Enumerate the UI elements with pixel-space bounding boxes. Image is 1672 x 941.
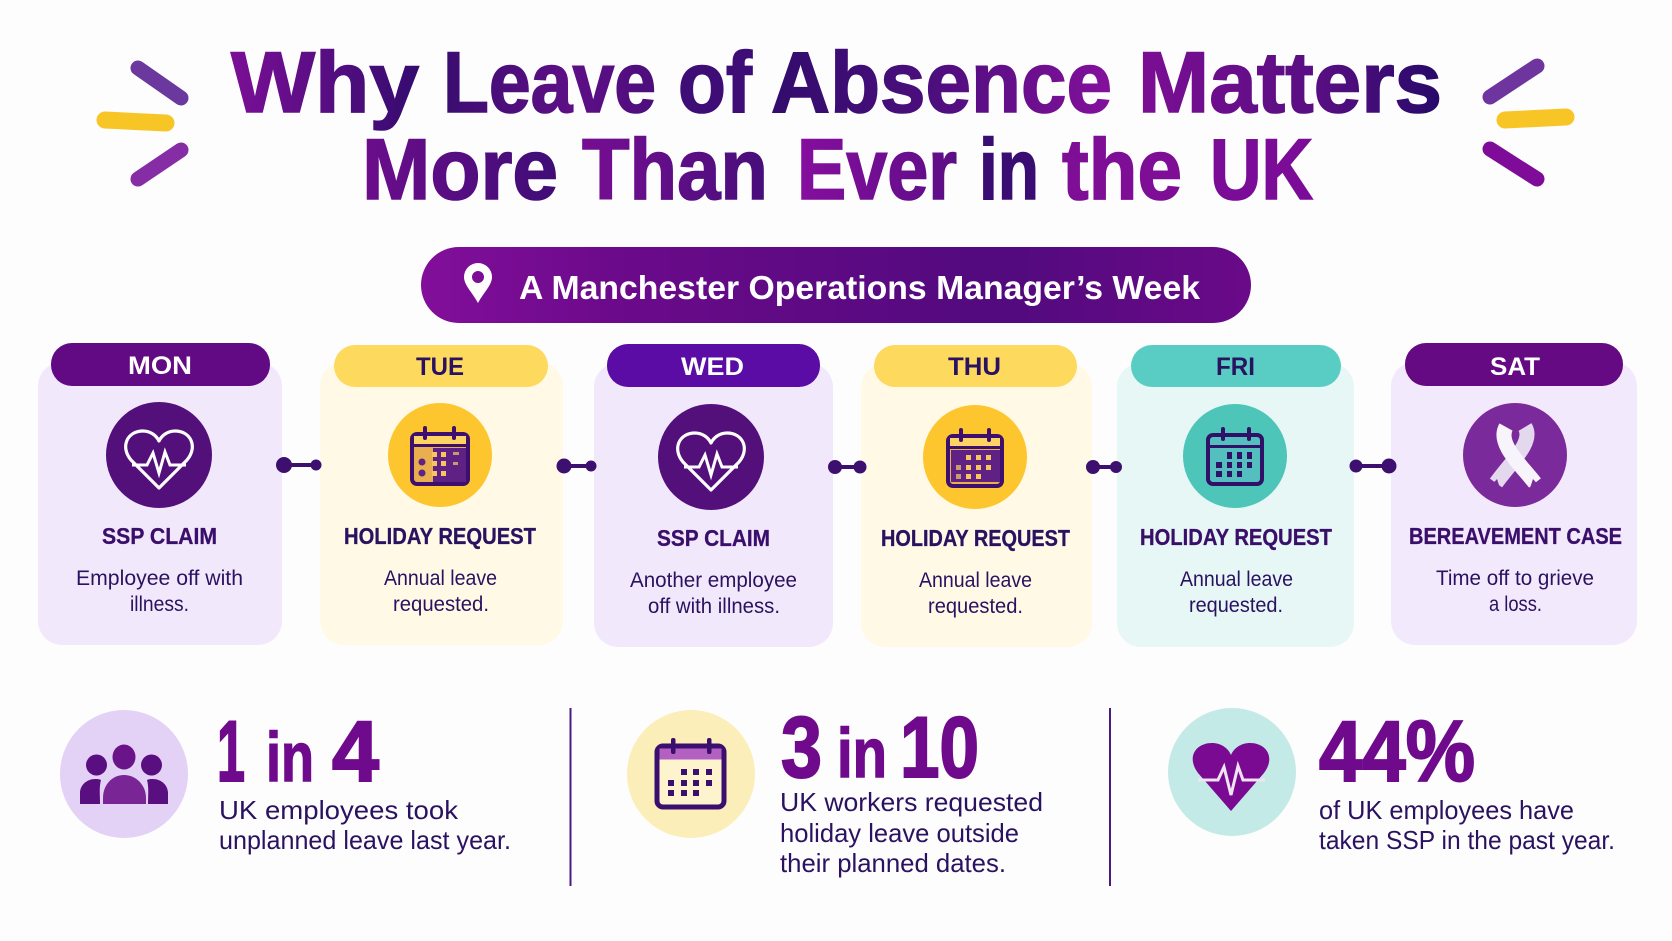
stat: 1 in 4: 1 [217,704,245,800]
icon: people [80,744,168,804]
panel: Saturday: Time off to grieve [1436,567,1594,590]
title: UK [1210,122,1313,218]
title [231,35,1442,218]
stat: 1 in 4: 4 [332,704,379,800]
stat: 1 in 4: unplanned leave last year. [219,825,511,855]
panel: Thursday [861,345,1092,647]
stat: 3 in 10: 3 [781,700,822,796]
panel: Monday: illness. [130,593,189,616]
panel: Wednesday: SSP CLAIM [657,525,770,551]
stat: 3 in 10 [627,700,1043,878]
title: the [1062,122,1182,218]
title: More [362,122,558,218]
panel: Tuesday [320,345,563,645]
stat: 44% [1168,704,1615,855]
stat: 1 in 4: in [266,718,314,796]
stat: 1 in 4: UK employees took [219,795,459,825]
connector Wed-Thu [828,460,866,474]
title: Matters [1138,35,1442,131]
panel: Friday: FRI [1216,353,1255,381]
panel: Saturday: a loss. [1489,593,1542,616]
panel: Friday [1117,345,1354,647]
panel: Wednesday: Another employee [630,569,797,592]
subtitle banner: A Manchester Operations Manager’s Week [519,269,1201,306]
panel: Thursday: THU [948,353,1001,381]
panel: Monday [38,343,282,645]
decorative sparks left [105,68,181,179]
icon: calendar [1208,427,1262,484]
stat: 3 in 10: holiday leave outside [780,818,1019,848]
stat: 44%: of UK employees have [1319,795,1574,825]
title: in [979,122,1039,218]
panel: Friday: HOLIDAY REQUEST [1140,524,1332,550]
panel: Thursday: HOLIDAY REQUEST [881,525,1070,551]
icon: ribbon [1488,427,1542,491]
stat: 44%: 44% [1319,704,1475,800]
title: Absence [771,35,1112,131]
panel: Monday: SSP CLAIM [102,523,217,549]
icon: calendar [948,428,1002,486]
stat: 1 in 4 [60,704,511,855]
stat: 3 in 10: 10 [900,700,979,796]
panel: Monday: MON [128,352,192,380]
stat: 3 in 10: their planned dates. [780,848,1006,878]
panel: Tuesday: TUE [416,353,464,381]
decorative sparks right [1490,66,1566,179]
icon: calendar [412,426,468,484]
panel: Wednesday [594,344,833,647]
subtitle banner [421,247,1251,323]
panel: Tuesday: requested. [393,593,489,616]
panel: Saturday [1391,343,1637,645]
panel: Wednesday: off with illness. [648,595,780,618]
panel: Thursday: Annual leave [919,569,1032,592]
icon: heart [1193,743,1269,811]
connector Mon-Tue [276,457,322,473]
panel: Wednesday: WED [681,353,744,381]
panel: Friday: requested. [1189,594,1283,617]
title: Leave [443,35,656,131]
connector Thu-Fri [1086,460,1122,474]
connector Fri-Sat [1350,458,1396,474]
panel: Monday: Employee off with [76,567,243,590]
title: of [678,35,752,131]
panel: Saturday: BEREAVEMENT CASE [1409,523,1622,549]
title: Than [582,122,768,218]
panel: Thursday: requested. [928,595,1023,618]
title: Ever [797,122,957,218]
panel: Saturday: SAT [1490,353,1540,381]
connector Tue-Wed [556,458,596,474]
title: Why [231,35,419,131]
panel: Tuesday: Annual leave [384,567,497,590]
panel: Tuesday: HOLIDAY REQUEST [344,523,536,549]
icon: calendar [657,738,724,807]
stat: 3 in 10: UK workers requested [780,787,1043,817]
panel: Friday: Annual leave [1180,568,1293,591]
stat: 3 in 10: in [837,714,887,792]
stat: 44%: taken SSP in the past year. [1319,825,1615,855]
